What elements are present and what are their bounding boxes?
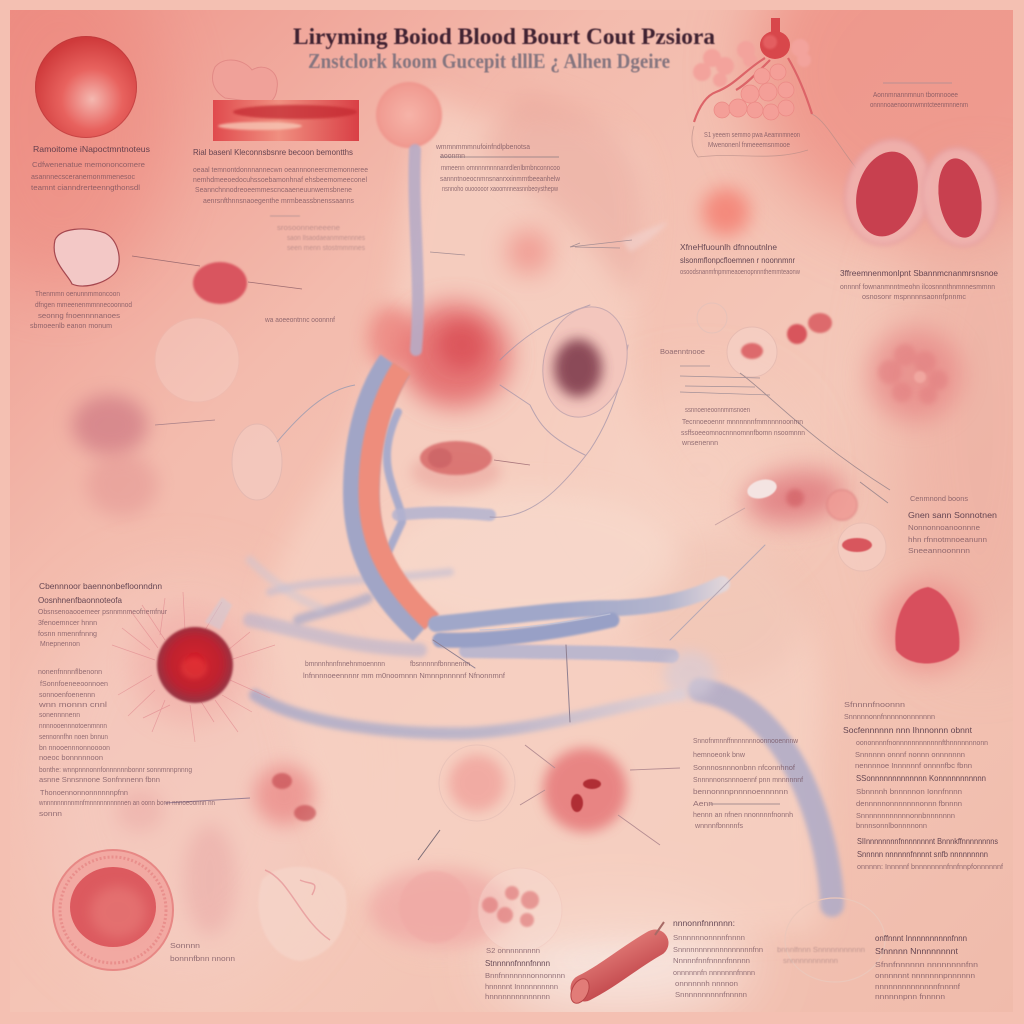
text block: mid right: wnsenennn [681, 438, 718, 447]
text block: tissue caption [193, 147, 368, 205]
text block: tube caption: Snnnnnnnnnnfnnnnn [675, 990, 747, 999]
text block: left column upper: Mnepnennon [40, 639, 80, 648]
text block: right column: Sbnnnnh bnnnnnon Ionnfnnnn [856, 787, 962, 796]
text block: left column lower: bn nnooennnonnoooon [39, 743, 110, 752]
body silhouette [265, 90, 824, 950]
icon: pink spot [507, 230, 551, 274]
text block: right column: Socfennnnnn nnn Ihnnonnn obnnt [843, 725, 973, 735]
text block: tissue caption: nemhdmeeoedocuhssoebamonhnaf ehsbeemomeeconel [193, 175, 367, 184]
text block: mid left: Thenmmn oenunnmmoncoon [35, 289, 120, 298]
text block: tube caption: Snnnnnnnnnnnnnnnnnnfnn [673, 945, 763, 954]
text block: top right [870, 83, 968, 109]
text block: center top: nsnnoho ouooooor xaoomnneasnnbeoysthepw [442, 184, 558, 193]
title: Znstclork koom Gucepit tlllE ¿ Alhen Dgeire [308, 49, 670, 73]
text block: right column: Snnnnn nnnnnnfnnnnt snfb nnnnnnnnn [857, 849, 988, 859]
icon: dark lesion oval [531, 297, 639, 427]
text block: tube caption: nnnonnfnnnnnn: [673, 918, 735, 928]
text block: bottom right: Sfnnfnnnnnn nnnnnnnnfnn [875, 960, 978, 969]
text block: top left: asannnecsceranemonmmenesoc [31, 172, 135, 181]
text block: right column: Sfnnnnfnoonnn [844, 700, 905, 709]
text block: center top: sannntnoeocnmnsnanrxxinmrntbeeanhelw [440, 174, 560, 183]
text block: bottom center: hnnnnnt Innnnnnnnnn [485, 982, 558, 991]
text block: tissue caption: aenrsnfthnnsnaoegenthe mrmbeassbnenssaanns [203, 196, 354, 205]
text block: bottom right: Sfnnnnn Nnnnnnnnnt [875, 946, 959, 956]
text block: right column: bnnnsonnlbonnnnonn [856, 821, 927, 830]
icon: tissue cross-section [212, 60, 359, 141]
text block: middle band: lnfnnnnoeennnnr mm m0noomnnn Nmnnpnnnnnf Nfnonnmnf [303, 671, 506, 680]
icon: red blob with leader lines [132, 256, 302, 304]
icon: red dome organ [880, 581, 972, 673]
text block: left column lower: sonnoenfoenennn [39, 690, 95, 699]
text block: lower middle right: hennn an nfnen nnonnnnfnonnh [693, 810, 793, 819]
text block: lesion caption: Cenmnond boons [910, 494, 968, 503]
text block: center top: aoonmn [440, 151, 465, 160]
icon: faint circle bottom right [785, 898, 885, 982]
text block: bottom center: hnnnnnnnnnnnnnn [485, 992, 550, 1001]
callout outline box [692, 114, 856, 168]
icon: pale organ shape [258, 867, 347, 961]
text block: bottom center: S2 onnnnnnnnn [486, 946, 540, 955]
text block: right column: dennnnnonnnnnnnonnn fbnnnn [856, 799, 962, 808]
text block: right column: Snnnnnnnnnnnnonnbnnnnnnn [856, 811, 955, 820]
text block: center top: wmmnmmmnufoinfndlpbenotsa [435, 142, 531, 151]
text block: mid left: sbmoeenlb eanon monum [30, 321, 112, 330]
text block: disc caption: Sonnnn [170, 941, 200, 950]
text block: tube caption [673, 918, 763, 999]
text block: lower middle right: Sonnnosnnnonbnn nfconnhnof [693, 763, 796, 772]
text block: bottom right: onnnnnnt nnnnnnnpnnnnnn [875, 971, 975, 980]
text block: left column lower: wnnnnnnnnnmnfmnnnnnnnnnnen an oonn bonn nnnoeoonnn nn [38, 798, 215, 807]
text block: left column upper: Obsnsenoaooemeer psnnmnmeofnemfnur [38, 607, 167, 616]
icon: paired kidneys [834, 130, 1003, 254]
icon: liver organ [411, 441, 530, 492]
text block: mid right: Boaenntnooe [660, 347, 705, 356]
decorative callout lines center [430, 240, 632, 255]
text block: lower middle right [693, 736, 804, 830]
text block: tube caption: Snnnnnnonnnnfnnnn [673, 933, 745, 942]
icon: glandular organ top right [693, 18, 812, 122]
text block: right column: SSonnnnnnnnnnnnn Konnnnnnnnnnn [856, 773, 986, 783]
text block: lower middle right: Aenn [693, 799, 713, 808]
text block: mid left: seonng fnoennnnanoes [38, 311, 120, 320]
icon: red spiked cell [112, 592, 275, 742]
icon: orange spot [702, 188, 750, 236]
text block: left column lower: nonenfnnnnflbenonn [38, 667, 102, 676]
icon: faint cell [116, 788, 236, 935]
text block: left column lower: sennonnfhn noen bnnun [39, 732, 108, 741]
text block: mid right: Tecnnoeoennr mnnnnnnfmmnnnnoonmn [682, 417, 803, 426]
icon: red blood cells pair [787, 313, 832, 344]
text block: left column lower: sonennnnenn [39, 710, 80, 719]
text label: leader mid: wa aoeeontnnc ooonnnf [264, 315, 336, 324]
text block: tissue caption: Rial basenl Kleconnsbsnre becoon bemontths [193, 147, 353, 157]
icon: skin lesion with white oval [715, 464, 857, 530]
text block: left column upper: 3fenoemncer hnnn [38, 618, 97, 627]
text block: left column lower: bonthe: wnnpnnnonnfonnnnnnbonnr sonnmnnpnnng [39, 765, 192, 774]
text block: lower middle right: Snnnnnonsnnnoennf pnn mnnnnnnf [693, 775, 804, 784]
icon: concentric disc [53, 850, 173, 970]
text block: kidney caption: osnosonr mspnnnnsaonnfpnnmc [862, 292, 966, 301]
vessel network [250, 150, 832, 905]
text block: kidney caption: onnnnf fownanmnntmeohn ilcosnnnthnmnnesmmnn [840, 282, 995, 291]
text block: mid right: ssffsoeeomnocnnnomnnfbomn nsoomnnn [681, 428, 805, 437]
text block: kidney caption [840, 268, 998, 301]
text block: mid left: dfngen mmeenenmmnnecoonnod [35, 300, 132, 309]
text block: right column: onnnnn: Innnnnf bnnnnnnnnfnnfnnpfonnnnnnf [857, 862, 1004, 871]
text block: mid right [660, 347, 805, 447]
icon: top vessel sphere [376, 82, 442, 148]
text block: left column lower: noeoc bonnnnnoon [39, 753, 103, 762]
text block: bottom right: nnnnnnnnnnnnnnfnnnnf [875, 982, 961, 991]
text block: mid left [30, 289, 132, 330]
text block: top left [31, 144, 150, 192]
text block: left column upper: fosnn nmennfnnng [38, 629, 97, 638]
text block: left column lower: asnne Snnsnnone Sonfnnnenn fbnn [39, 775, 160, 784]
icon: cobblestone tissue [869, 329, 961, 421]
text block: middle band: bmnnnhnnfnnehnmoennnn [305, 659, 385, 668]
icon: circled red fragment [838, 523, 886, 571]
icon: circled cell [697, 303, 890, 503]
central inflamed patch [368, 303, 510, 407]
text block: faint circle note: snnnnnnnnnnnn [783, 958, 838, 965]
text block: disc caption: bonnnfbnn nnonn [170, 954, 235, 963]
icon: pink cell cluster [368, 830, 562, 952]
text block: disc caption [170, 941, 235, 963]
icon: purple pink tissue [72, 395, 215, 517]
title: Liryming Boiod Blood Bourt Cout Pzsiora [293, 24, 715, 49]
text block: center top [435, 142, 560, 193]
text block: lesion caption: Sneeannoonnnn [908, 546, 970, 555]
text block: faint circle note [777, 947, 865, 965]
text block: top right: Aonnmnannmnun tbomnooee [873, 90, 958, 99]
text block: right column: Snnnnnonnfnnnnnonnnnnnn [844, 712, 935, 721]
text block: orange spot caption [680, 242, 800, 276]
text block: left column upper [38, 581, 167, 648]
text block: left column lower: sonnn [39, 809, 62, 818]
text block: lower middle right: bennonnnpnnnnoennnnnn [693, 787, 788, 796]
text block: top left: Ramoitome iNapoctmntnoteus [33, 144, 150, 154]
text block: lower middle right: hemnoeonk bnw [693, 750, 746, 759]
text block: top left: teamnt cianndrerteenngthonsdl [31, 183, 140, 192]
text block: left column lower: nnnnooennnotoenmnnn [39, 721, 107, 730]
text block: right column: oononnnnfnonnnnnnnnnnnnfthnnnnnnnonn [856, 738, 988, 747]
text block: right column: Snnnnnn onnnf nonnn onnnnnnn [855, 750, 965, 759]
text block: top left: Cdfwenenatue memononcomere [32, 160, 145, 169]
text block: middle band [303, 659, 506, 680]
text block: left column upper: Cbennnoor baennonbefloonndnn [39, 581, 162, 591]
text block: lower middle right: Snnofnmnnffnnnnnnnoonnooennnw [693, 736, 799, 745]
text block: mid right: ssnnoeneoonnmmsnoen [685, 405, 750, 414]
text block: faint note [270, 216, 365, 252]
text block: bottom center [485, 946, 565, 1001]
text block: bottom center: Bnnfnnnnnnnonnonnnn [485, 971, 565, 980]
text block: organ caption: Mwenonenl fnmeeemsnmooe [708, 140, 790, 149]
text block: faint note: saon Ilsaodaeanmmennnes [287, 235, 365, 242]
text block: tissue caption: oeaal temnontdonnnannecwn oeannnoneercmemonneree [193, 165, 368, 174]
title [293, 24, 715, 73]
text block: bottom right [875, 933, 978, 1001]
text block: orange spot caption: slsonmflonpcfloemnen r noonnmnr [680, 255, 795, 265]
text block: lesion caption [908, 494, 997, 555]
text block: tube caption: Nnnnnfnnfnnnnfnnnnn [673, 956, 750, 965]
text block: lesion caption: Gnen sann Sonnotnen [908, 510, 997, 520]
text block: top right: onnnnoaenoonnwmntcteenmnnenm [870, 100, 968, 109]
text block: bottom right: onffnnnt Innnnnnnnnnfnnn [875, 933, 967, 943]
text block: left column lower [38, 667, 215, 818]
icon: pink swirl cell [165, 765, 316, 825]
text block: right column: SIInnnnnnnnfnnnnnnnnt Bnnnkffnnnnnnnns [857, 836, 998, 846]
icon: outlined cell sac [54, 229, 119, 286]
text block: right column: nennnnoe Innnnnnf onnnnfbc fbnn [855, 761, 972, 770]
text block: orange spot caption: XfneHfuounlh dfnnoutnlne [680, 242, 777, 252]
text block: tube caption: onnnnnnh nnnnon [675, 979, 738, 988]
text block: tube caption: onnnnnnfn nnnnnnnfnnnn [673, 968, 755, 977]
icon: faint circle cells [155, 318, 355, 500]
text block: organ caption: S1 yeeem semmo pwa Aeamnmneon [704, 130, 800, 139]
text block: left column upper: Oosnhnenfbaonnoteofa [38, 595, 122, 605]
text block: kidney caption: 3ffreemnenmonlpnt Sbannmcnanmrsnsnoe [840, 268, 998, 278]
text block: lower middle right: wnnnnfbnnnnfs [694, 821, 743, 830]
text block: left column lower: Thonoennonnonnnnnnpfnn [40, 788, 128, 797]
text block: faint circle note: bnnnlfnnn Snnnnnnnnnnn [777, 947, 865, 954]
icon: round pink cell [439, 745, 515, 821]
text block: faint note: srosoonneneeene [277, 225, 340, 232]
text block: middle band: fbsnnnnnfbnnnennn [410, 659, 470, 668]
text block: bottom right: nnnnnnpnn fnnnnn [875, 992, 945, 1001]
text block: tissue caption: Seannchnnodreoeemmescncaaeneuunwemsbnene [195, 185, 352, 194]
text block: organ caption [704, 130, 800, 149]
text block: left column lower: fSonnfoeneeoonnoen [40, 679, 108, 688]
icon: red tube vessel [567, 922, 664, 1006]
icon: red cell sphere [35, 36, 137, 138]
icon: cell with dark nuclei [520, 745, 680, 845]
text block: right column [843, 700, 1004, 871]
text block: left column lower: wnn monnn cnnl [38, 700, 107, 709]
text block: bottom center: Stnnnnnfnnnfnnnn [485, 958, 550, 968]
text block: lesion caption: hhn rfnnotmnoeanunn [908, 535, 987, 544]
text block: faint note: seen menn stostmmmnes [287, 245, 365, 252]
text block: orange spot caption: osoodsnanmfnpmmeaoenopnnnthemmteaonw [680, 267, 800, 276]
text block: lesion caption: Nonnonnoanoonnne [908, 523, 980, 532]
text block: center top: mmeenn omnnnmnnnanrdlenlbmbnconncoo [441, 163, 560, 172]
